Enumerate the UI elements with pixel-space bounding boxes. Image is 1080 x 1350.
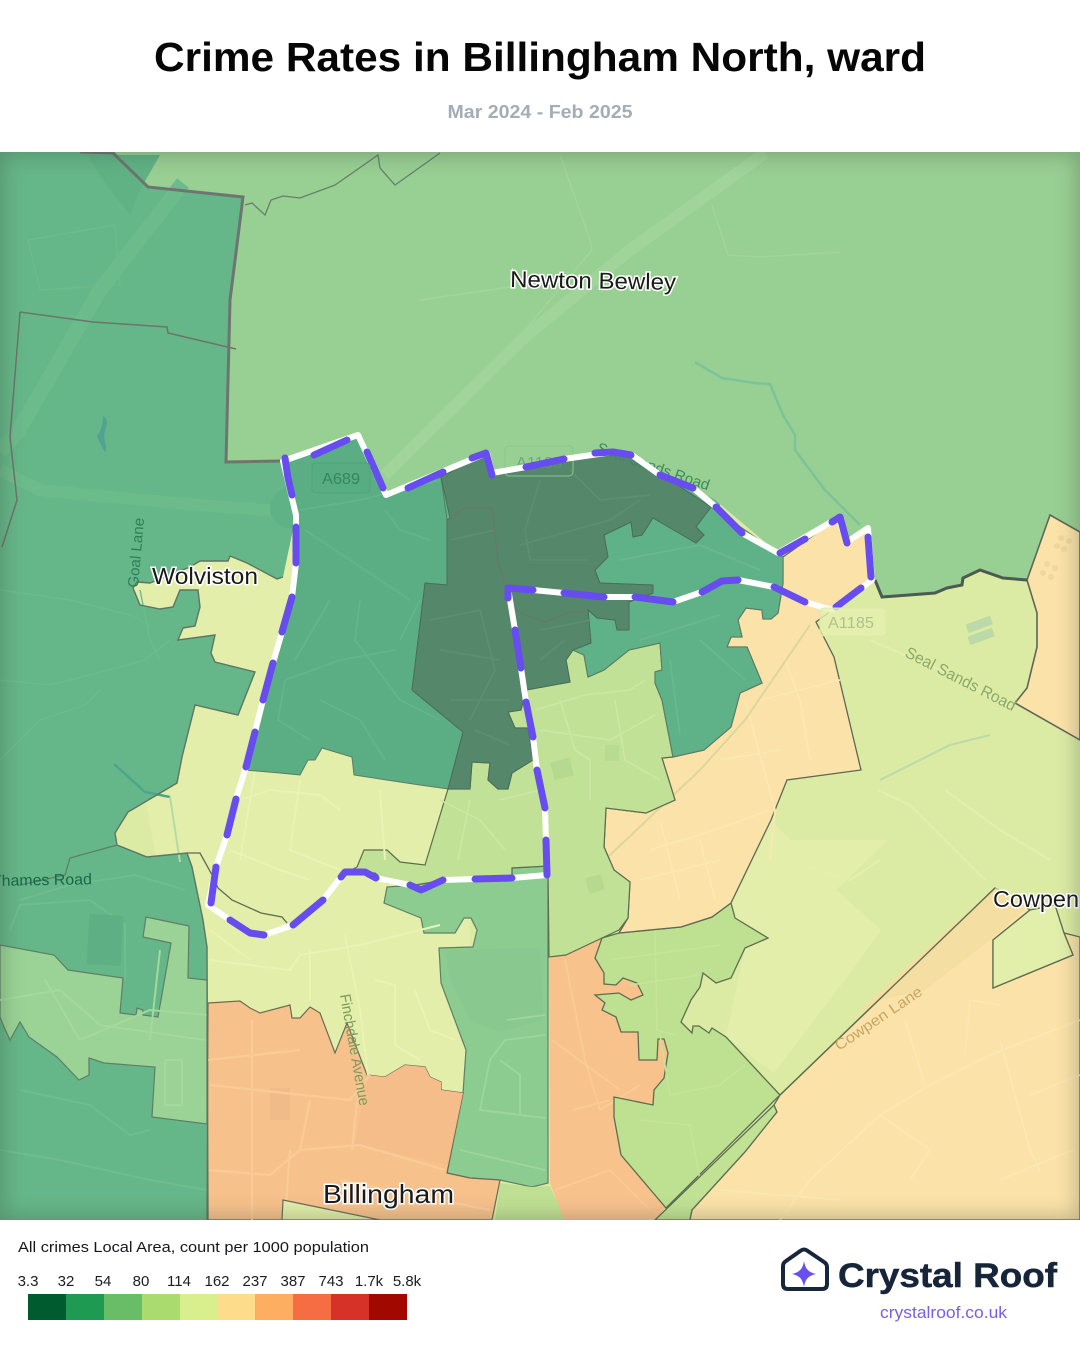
streets in centre green bbox=[440, 680, 660, 860]
area: pale strip, south bbox=[282, 1200, 380, 1220]
lower pale streets bbox=[210, 770, 455, 1075]
area: ward west green bbox=[245, 435, 463, 789]
stream west bbox=[114, 764, 170, 797]
area: boundary line in pale south-west bbox=[187, 853, 287, 923]
main road band west bbox=[170, 178, 189, 190]
area: Newton Bewley bbox=[80, 152, 1080, 597]
area: pale rural background bbox=[116, 504, 1080, 1220]
legend numbers: 1.7k bbox=[355, 1273, 384, 1290]
area: green strip south bbox=[495, 1183, 565, 1220]
logo wordmark: Crystal Roof bbox=[838, 1257, 1058, 1295]
road badge A1185: A1185 bbox=[516, 455, 562, 472]
legend numbers: 162 bbox=[204, 1273, 230, 1290]
sub-boundary lines west bbox=[20, 312, 236, 349]
ward base fill bbox=[442, 466, 720, 520]
legend numbers: 80 bbox=[133, 1273, 149, 1290]
area: medium green south block bbox=[384, 866, 548, 1187]
place label Wolviston: Wolviston bbox=[152, 563, 258, 589]
legend numbers bbox=[18, 1273, 422, 1290]
legend colour scale bbox=[28, 1294, 407, 1320]
road label Seal Sands Road east: Seal Sands Road bbox=[902, 644, 1019, 715]
streets in central peach bbox=[640, 660, 840, 900]
road label Goal Lane: Goal Lane bbox=[125, 517, 148, 588]
icon: house with star bbox=[783, 1250, 827, 1289]
streets in east orange bbox=[552, 960, 650, 1210]
title: Crime Rates in Billingham North, ward bbox=[154, 34, 926, 80]
area: peach central bbox=[604, 518, 872, 933]
area: orange east Billingham bbox=[549, 938, 668, 1220]
legend numbers: 114 bbox=[167, 1273, 191, 1290]
map panel bbox=[0, 152, 1080, 1220]
darker field in south block bbox=[445, 948, 543, 1032]
legend numbers: 387 bbox=[280, 1273, 306, 1290]
road badge A689: A689 bbox=[322, 471, 360, 488]
fields in eastern pale area bbox=[790, 640, 1050, 880]
area: peach south-east bbox=[690, 888, 1080, 1220]
place label Billingham: Billingham bbox=[323, 1179, 454, 1209]
road band across Newton Bewley bbox=[385, 153, 765, 475]
pond bbox=[97, 416, 107, 452]
boundary of Newton Bewley east bbox=[875, 570, 1027, 597]
area: light centre green bbox=[345, 643, 675, 957]
area: ward east green bbox=[573, 507, 783, 757]
logo: Crystal Roof bbox=[783, 1250, 1058, 1322]
tan strip by Cowpen Lane bbox=[850, 888, 1030, 1020]
internal sub-boundaries in dark zone bbox=[450, 508, 585, 622]
legend numbers: 5.8k bbox=[393, 1273, 422, 1290]
streets lower west bbox=[0, 950, 207, 1105]
legend numbers: 3.3 bbox=[18, 1273, 38, 1290]
legend bbox=[18, 1239, 422, 1320]
legend title: All crimes Local Area, count per 1000 population bbox=[18, 1239, 369, 1256]
industrial tanks bbox=[1040, 535, 1072, 580]
place label Cowpen: Cowpen bbox=[993, 886, 1079, 912]
streets in orange bbox=[208, 1020, 490, 1220]
road badge A1185 east bbox=[820, 608, 886, 636]
area: pale west background bbox=[100, 550, 470, 1100]
area: strip below Cowpen Lane bbox=[655, 1105, 777, 1220]
dotted darker block in orange bbox=[366, 1065, 463, 1165]
darker patches west bbox=[270, 504, 290, 518]
boundary top bbox=[245, 153, 440, 215]
area: light green east bbox=[595, 903, 780, 1208]
thick boundary of Newton Bewley west bbox=[80, 152, 283, 462]
area: ward dark high-crime zone bbox=[412, 453, 711, 789]
road badge A1185 bbox=[505, 446, 573, 476]
streets in light green east bbox=[630, 930, 700, 1176]
ward outline: white with purple dashes bbox=[208, 435, 872, 935]
legend numbers: 743 bbox=[318, 1273, 344, 1290]
boundary west of Wolviston bbox=[115, 556, 283, 1220]
streets in dark zone bbox=[430, 470, 650, 745]
stream bbox=[695, 362, 860, 525]
subtitle: date range: Mar 2024 - Feb 2025 bbox=[448, 101, 632, 122]
legend numbers: 54 bbox=[95, 1273, 111, 1290]
road label Cowpen Lane: Cowpen Lane bbox=[832, 983, 926, 1054]
road badge A1185 east: A1185 bbox=[828, 615, 874, 632]
legend numbers: 237 bbox=[242, 1273, 268, 1290]
streets in south block bbox=[460, 1015, 545, 1170]
area: pale block near Cowpen bbox=[993, 905, 1073, 988]
logo url: crystalroof.co.uk bbox=[880, 1304, 1008, 1322]
area: lower west lighter block bbox=[0, 917, 207, 1124]
legend numbers: 32 bbox=[58, 1273, 74, 1290]
farm tracks bbox=[420, 155, 840, 330]
road badge A689 bbox=[312, 463, 370, 493]
streets west ward bbox=[278, 480, 440, 760]
road label Finchdale Avenue: Finchdale Avenue bbox=[336, 993, 372, 1107]
road label Seal Sands Road north: Seal Sands Road bbox=[595, 440, 712, 494]
area: lighter eastern fields bbox=[726, 820, 888, 1073]
map edge vignette bbox=[0, 152, 1080, 1220]
area: peach north-east corner bbox=[1015, 515, 1080, 740]
place label Newton Bewley: Newton Bewley bbox=[510, 266, 677, 295]
streets in peach south-east bbox=[720, 1000, 1080, 1220]
streets east ward bbox=[620, 545, 760, 735]
area: western green bbox=[0, 152, 296, 1220]
area: orange west Billingham bbox=[207, 1001, 500, 1220]
streets: western fields bbox=[139, 590, 144, 606]
